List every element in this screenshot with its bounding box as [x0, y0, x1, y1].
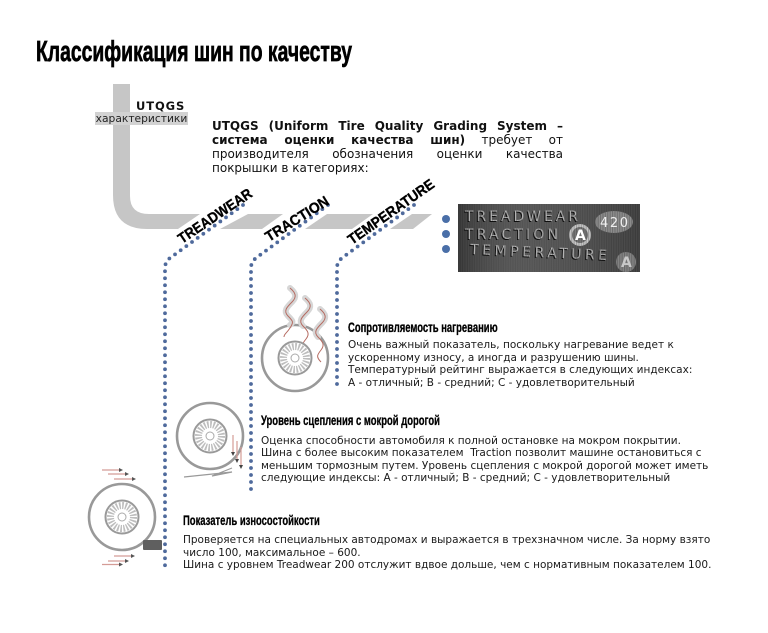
intro text [212, 119, 563, 175]
rotated labels [175, 176, 438, 248]
tread photo: TEMPERATURE [468, 243, 606, 265]
dotted line: treadwear [165, 205, 243, 572]
section: treadwear text [183, 534, 711, 571]
blue bullets [442, 215, 450, 253]
section: treadwear text: число 100, максимальное – 600. [183, 547, 361, 559]
tread photo: A [621, 255, 632, 271]
intro text: система оценки качества шин) требует от [212, 133, 563, 147]
tread photo: 420 [600, 216, 628, 231]
section: treadwear heading: Показатель износостойкости [183, 513, 320, 528]
section: traction text: меньшим тормозным путем. Уровень сцепления с мокрой дорогой может иметь [261, 460, 708, 472]
tread photo: A [575, 228, 586, 244]
section: temperature text: Температурный рейтинг выражается в следующих индексах: [348, 364, 692, 376]
section: traction text: Шина с более высоким показателем Traction позволит машине остановиться с [261, 447, 702, 459]
intro text: покрышки в категориях: [212, 161, 369, 175]
section: treadwear text: Шина с уровнем Treadwear 200 отслужит вдвое дольше, чем с нормативным показателем 100. [183, 559, 711, 571]
grey branching bar [113, 84, 432, 229]
tread photo: TRACTION [464, 227, 558, 243]
section: traction text: Оценка способности автомобиля к полной остановке на мокром покрытии. [261, 434, 681, 446]
tread photo [458, 204, 640, 272]
intro text: производителя обозначения оценки качества [212, 147, 563, 161]
icon: tire on wet road [177, 403, 243, 477]
section: temperature text: Очень важный показатель, поскольку нагревание ведет к [348, 339, 674, 351]
section: temperature text: ускоренному износу, а иногда и разрушению шины. [348, 352, 639, 364]
label: характеристики: характеристики [96, 112, 187, 125]
label: TEMPERATURE: TEMPERATURE [345, 176, 438, 248]
tread photo: TREADWEAR [464, 209, 578, 225]
icon: tire with wear block [89, 468, 162, 566]
section: treadwear text: Проверяется на специальных автодромах и выражается в трехзначном числе. За норму взято [183, 534, 710, 546]
section: temperature heading: Сопротивляемость нагреванию [348, 320, 498, 335]
label: UTQGS: UTQGS [136, 99, 185, 113]
label: TREADWEAR: TREADWEAR [175, 186, 256, 247]
dotted line: temperature [337, 205, 414, 388]
label: TRACTION: TRACTION [263, 194, 332, 245]
section: traction text: следующие индексы: А - отличный; В - средний; С - удовлетворительный [261, 472, 670, 484]
tread photo: TREADWEAR [463, 210, 577, 226]
icon: heated tire [262, 288, 328, 391]
tread photo: TEMPERATURE [469, 242, 607, 264]
section: traction text [261, 434, 708, 484]
tread photo: TRACTION [463, 228, 557, 244]
intro text: UTQGS (Uniform Tire Quality Grading System – [212, 119, 563, 133]
section: temperature text: А - отличный; В - средний; С - удовлетворительный [348, 377, 635, 389]
section: temperature text [348, 339, 692, 389]
section: traction heading: Уровень сцепления с мокрой дорогой [261, 413, 440, 428]
dotted line: traction [251, 205, 328, 490]
title: Классификация шин по качеству [36, 36, 352, 68]
